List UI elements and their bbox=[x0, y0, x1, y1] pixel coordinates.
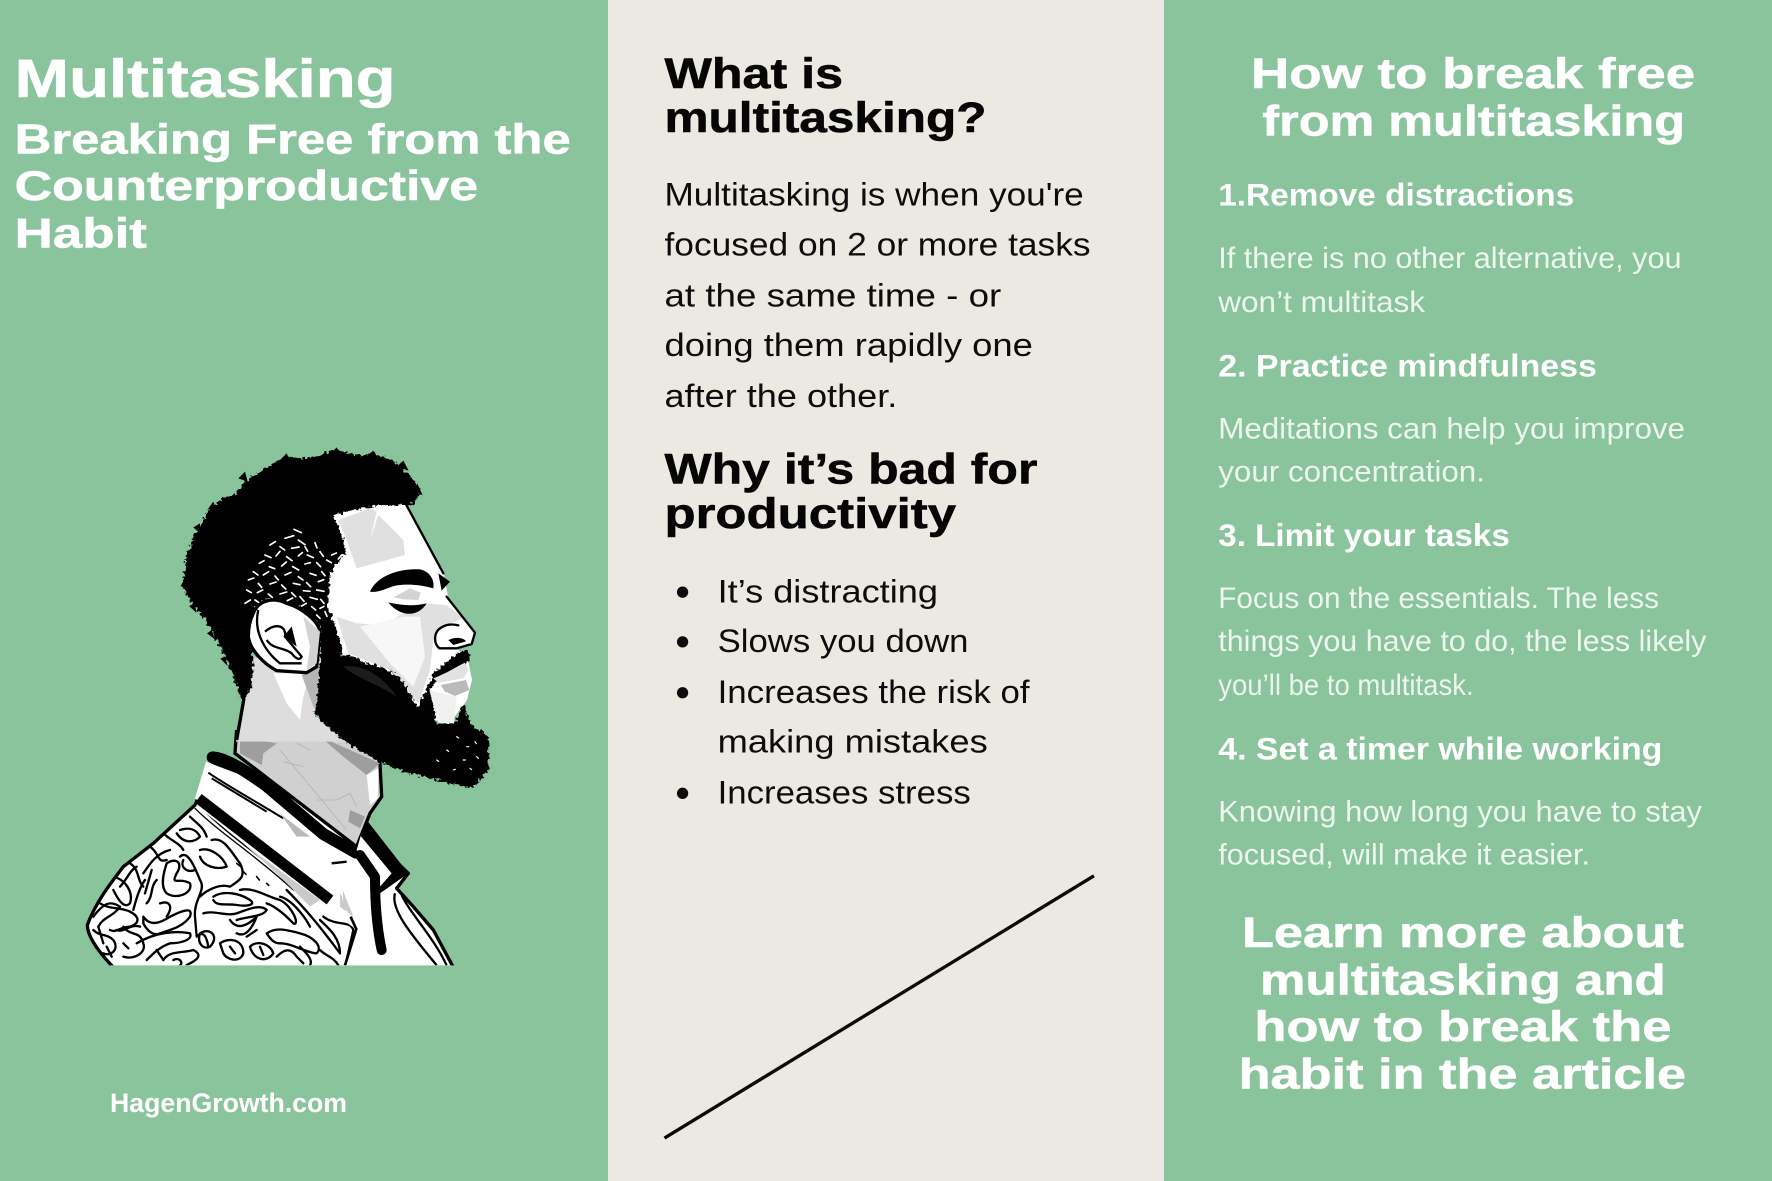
nostril bbox=[448, 638, 466, 645]
bullet list: Increases the risk of bbox=[718, 673, 1030, 710]
tip 3: things you have to do, the less likely bbox=[1218, 625, 1707, 658]
tip 3: you’ll be to multitask. bbox=[1218, 669, 1474, 702]
hair outline tufts bbox=[181, 447, 423, 666]
tip 1: 1.Remove distractions bbox=[1218, 177, 1574, 213]
placket shading bbox=[343, 890, 353, 917]
tip 4: 4. Set a timer while working bbox=[1218, 730, 1662, 766]
shirt shading bbox=[244, 844, 346, 912]
neck top bbox=[236, 657, 343, 742]
face shading bbox=[337, 508, 463, 703]
placket stripe bbox=[360, 855, 382, 950]
beard sheen bbox=[343, 666, 397, 697]
heading: Why it's bad for productivity: productivity bbox=[664, 490, 956, 538]
neck edge bbox=[237, 698, 244, 740]
shirt pattern bbox=[93, 808, 353, 965]
heading: How to break free bbox=[1251, 50, 1695, 146]
right collar tip bbox=[362, 822, 406, 894]
face bbox=[327, 505, 475, 727]
collar bbox=[195, 757, 408, 902]
heading: How to break free: How to break free bbox=[1251, 50, 1695, 98]
neck highlight bbox=[273, 673, 310, 720]
tip 2: your concentration. bbox=[1218, 455, 1485, 488]
tip 2: Meditations can help you improve bbox=[1218, 412, 1685, 445]
heading: Why it's bad for productivity: Why it’s bad for bbox=[664, 446, 1038, 494]
call to action: multitasking and bbox=[1260, 956, 1666, 1004]
definition paragraph: focused on 2 or more tasks bbox=[664, 225, 1091, 262]
eyelid bbox=[393, 588, 421, 600]
tip 4 bbox=[1218, 730, 1702, 872]
cheek highlight bbox=[360, 617, 425, 687]
definition paragraph: at the same time - or bbox=[664, 276, 1001, 313]
shirt front placket bbox=[342, 896, 440, 966]
right shirt lines bbox=[394, 893, 447, 965]
call to action: how to break the bbox=[1254, 1003, 1671, 1051]
subtitle bbox=[15, 116, 571, 256]
bullet list: making mistakes bbox=[718, 723, 988, 760]
tip 3: 3. Limit your tasks bbox=[1218, 517, 1510, 553]
definition paragraph: Multitasking is when you're bbox=[664, 176, 1084, 213]
heading: What is multitasking: What is bbox=[664, 50, 843, 98]
heading: How to break free: from multitasking bbox=[1262, 98, 1685, 146]
forehead and nose contour bbox=[406, 504, 475, 648]
left panel website: HagenGrowth.com bbox=[110, 1088, 347, 1118]
heading: Why it's bad for productivity bbox=[664, 446, 1038, 538]
heading: What is multitasking bbox=[664, 50, 987, 142]
middle panel content bbox=[664, 50, 1094, 1138]
neck highlight bbox=[367, 768, 378, 805]
tip 1: If there is no other alternative, you bbox=[1218, 242, 1682, 275]
tip 2 bbox=[1218, 347, 1685, 488]
neck shadow bbox=[302, 663, 325, 717]
subtitle: Habit bbox=[15, 209, 147, 256]
tip 3: Focus on the essentials. The less bbox=[1218, 582, 1659, 615]
right panel content bbox=[1217, 50, 1707, 1098]
shirt bbox=[87, 763, 453, 967]
subtitle: Breaking Free from the bbox=[15, 116, 571, 163]
call to action: Learn more about bbox=[1242, 909, 1684, 957]
torso, collar and neck bbox=[87, 728, 453, 967]
bullet list: Slows you down bbox=[718, 622, 968, 659]
call to action: habit in the article bbox=[1239, 1050, 1686, 1098]
tip 4: Knowing how long you have to stay bbox=[1218, 796, 1702, 829]
eyebrow tail bbox=[438, 573, 450, 591]
tip 2: 2. Practice mindfulness bbox=[1218, 347, 1597, 383]
illustration: man in profile with eyes closed bbox=[87, 447, 489, 967]
left panel title bbox=[15, 49, 571, 256]
tip 1 bbox=[1217, 177, 1682, 319]
lips bbox=[433, 663, 469, 696]
panel: middle beige background bbox=[608, 0, 1164, 1181]
bullet list bbox=[677, 572, 1030, 811]
definition paragraph bbox=[664, 176, 1091, 414]
neck bbox=[235, 728, 382, 847]
definition paragraph: after the other. bbox=[664, 377, 897, 414]
neck contour lines bbox=[280, 743, 357, 830]
bullet list: It’s distracting bbox=[718, 572, 938, 609]
closed eye bbox=[388, 602, 427, 614]
beard bbox=[313, 650, 489, 788]
panel: left green background bbox=[0, 0, 608, 1181]
ear bbox=[248, 600, 320, 673]
beard flecks bbox=[437, 737, 478, 770]
head bbox=[181, 447, 489, 788]
hair bbox=[183, 450, 420, 703]
tip 4: focused, will make it easier. bbox=[1218, 839, 1590, 872]
chin highlight bbox=[429, 690, 457, 723]
diagonal line bbox=[664, 876, 1094, 1138]
call to action bbox=[1239, 909, 1686, 1098]
tip 3 bbox=[1218, 517, 1707, 702]
short curls on the temple bbox=[245, 529, 342, 618]
neck shading bbox=[240, 737, 380, 828]
tip 1: won’t multitask bbox=[1217, 286, 1425, 319]
bullet list: Increases stress bbox=[718, 774, 971, 811]
panel: right green background bbox=[1164, 0, 1772, 1181]
heading: What is multitasking: multitasking? bbox=[664, 94, 987, 142]
eyebrow bbox=[370, 569, 434, 592]
title: Multitasking: Multitasking bbox=[15, 49, 396, 109]
subtitle: Counterproductive bbox=[15, 162, 478, 209]
definition paragraph: doing them rapidly one bbox=[664, 326, 1033, 363]
